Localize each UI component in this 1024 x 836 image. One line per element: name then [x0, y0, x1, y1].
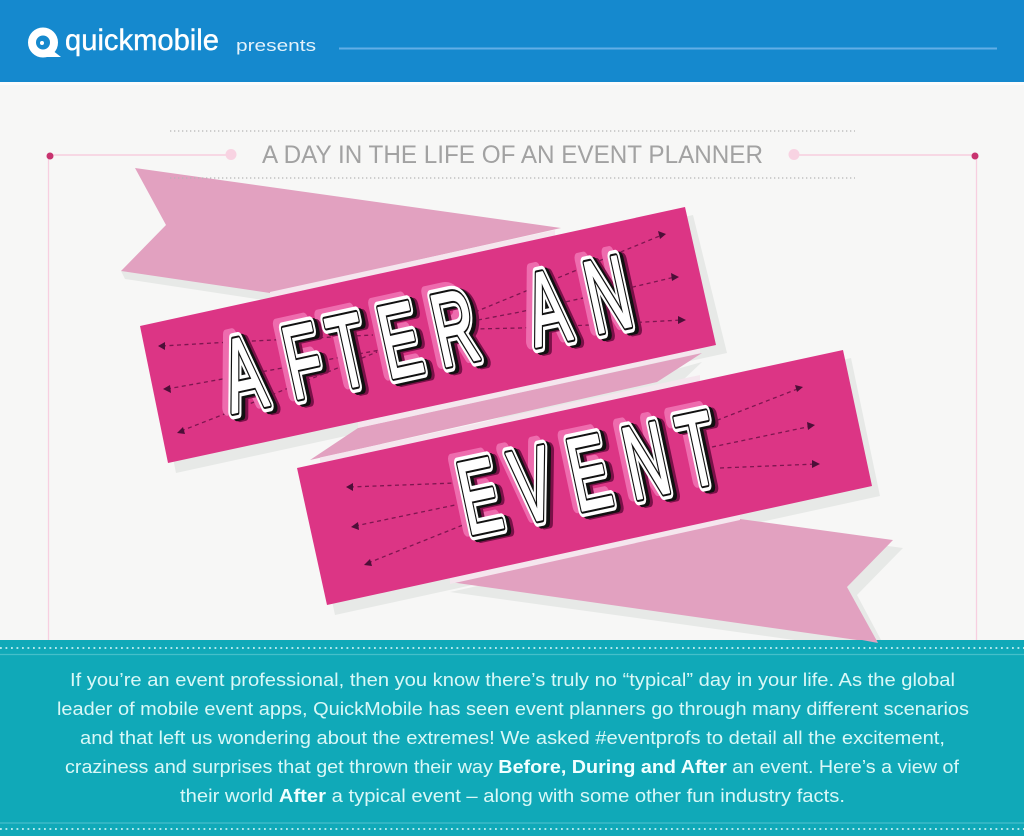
intro panel [0, 640, 1024, 836]
icon: quickmobile logo [32, 32, 61, 57]
title word: after an: AFTERAN [212, 233, 641, 435]
title word: event: EVENT [449, 389, 727, 557]
intro text: If you’re an event professional, then you know there’s truly no “typical” day in your life. As the global [70, 669, 955, 690]
brand name: quickmobile [65, 24, 219, 57]
intro text: and that left us wondering about the extremes! We asked #eventprofs to detail all the excitement, [80, 727, 945, 748]
ribbon shadows [121, 215, 903, 653]
header rule [339, 48, 997, 50]
subtitle heading: A DAY IN THE LIFE OF AN EVENT PLANNER [262, 141, 763, 169]
title word: after an: AFTERAN [219, 236, 648, 437]
title word: after an: AFTERAN [212, 233, 641, 435]
header bar [0, 0, 1024, 85]
dotted rule under heading [170, 177, 855, 179]
title word: event: EVENT [449, 389, 727, 557]
intro text [57, 669, 969, 806]
ribbon tail: top [121, 168, 561, 293]
ribbon tip overlap [862, 640, 878, 643]
title word: event: EVENT [452, 391, 731, 559]
intro text: their world After a typical event – along with some other fun industry facts. [180, 785, 845, 806]
banner: event [297, 350, 872, 605]
title word: event: EVENT [455, 392, 734, 559]
dashed arrows: event [346, 385, 820, 566]
title word: after an: AFTERAN [216, 235, 644, 437]
ribbon graphic [121, 168, 903, 653]
presents label: presents [236, 36, 316, 55]
intro text: leader of mobile event apps, QuickMobile has seen event planners go through many different scenarios [57, 698, 969, 719]
title word: event: EVENT [449, 389, 727, 557]
title word: event: EVENT [443, 385, 721, 553]
intro text: craziness and surprises that get thrown their way Before, During and After an event. Here’s a view of [65, 756, 960, 777]
banner edges [270, 230, 740, 584]
subtitle frame [46, 131, 978, 640]
title word: after an: AFTERAN [212, 233, 641, 435]
ribbon tail: middle [310, 353, 702, 460]
dashed arrows: after an [158, 231, 686, 434]
banner: after an [140, 207, 716, 463]
ribbon tail: bottom [450, 519, 893, 643]
title word: after an: AFTERAN [206, 230, 635, 431]
